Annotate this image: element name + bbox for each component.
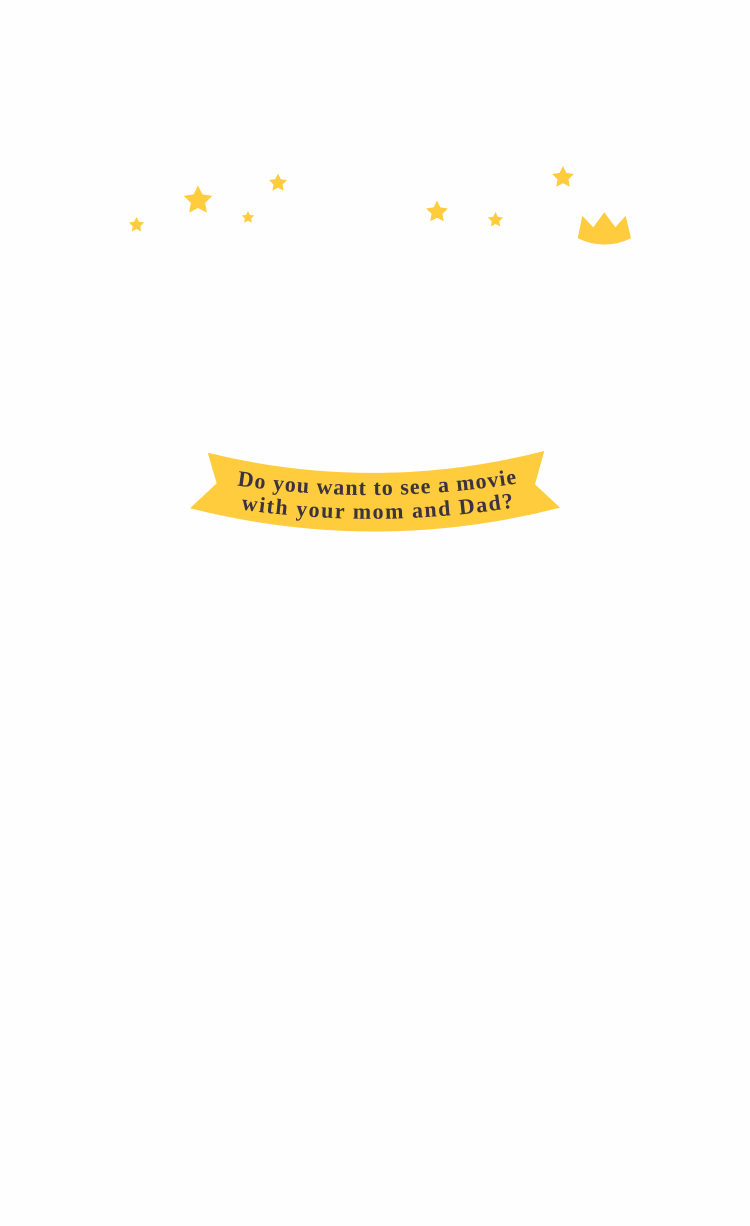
- star 4: [269, 174, 287, 191]
- star 1: [129, 217, 144, 231]
- banner text: [237, 470, 516, 521]
- banner text: with your mom and Dad?: [242, 494, 512, 521]
- ribbon shape: [190, 451, 560, 532]
- banner text: Do you want to see a movie: [237, 470, 516, 496]
- icon: crown: [578, 212, 631, 245]
- star 2: [184, 186, 212, 213]
- banner: question ribbon: [190, 451, 560, 532]
- star 7: [552, 166, 574, 187]
- star 6: [488, 212, 503, 226]
- star 5: [426, 200, 448, 221]
- star 3: [242, 211, 254, 223]
